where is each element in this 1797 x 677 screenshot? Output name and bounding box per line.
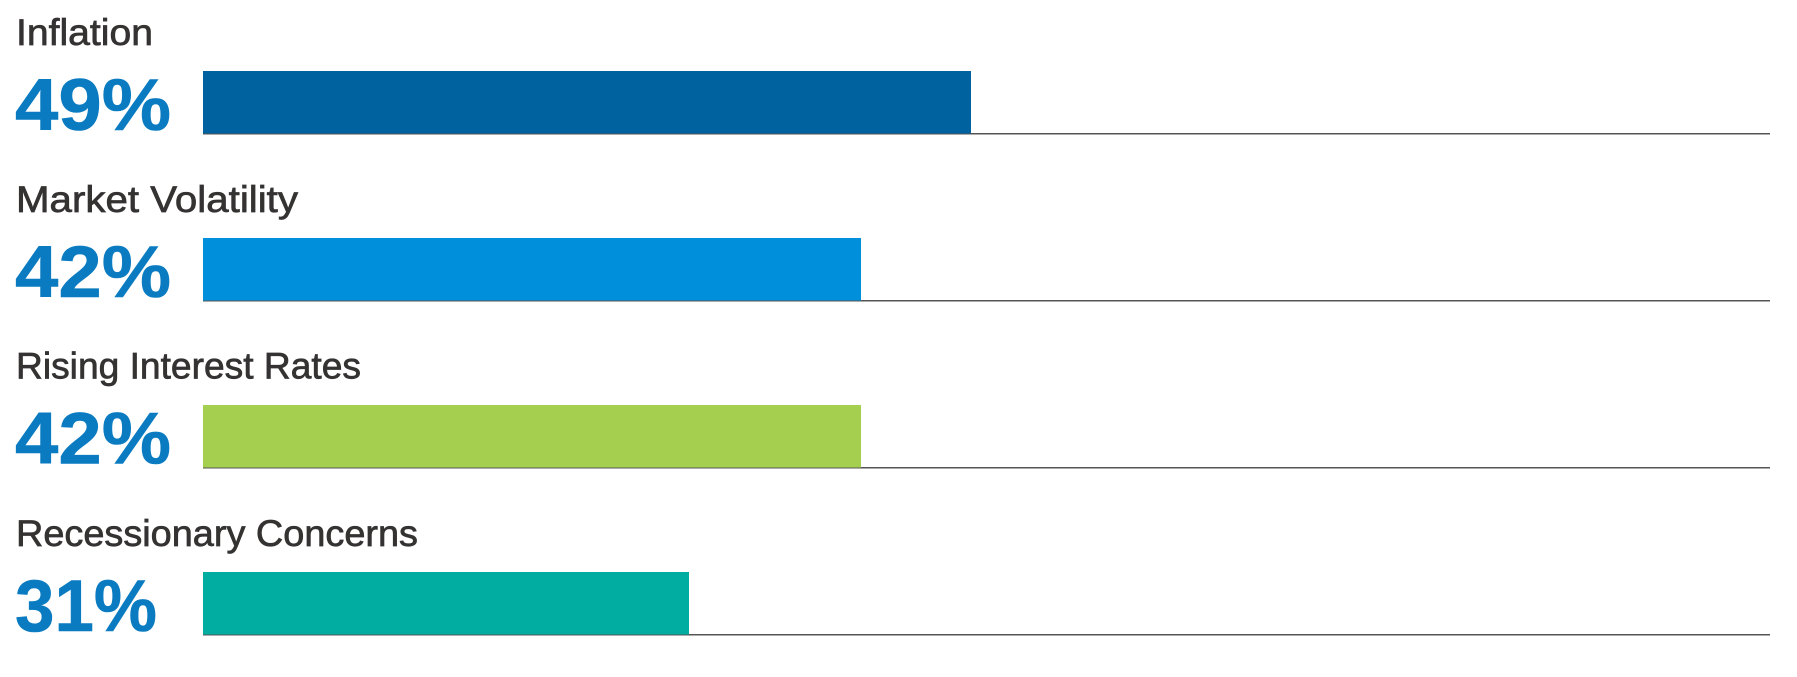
row: Recessionary Concerns — [15, 513, 1770, 647]
bar: 42% — [203, 405, 861, 468]
bar: 42% — [203, 238, 861, 300]
row: Inflation — [15, 12, 1770, 146]
bar: 31% — [203, 572, 689, 634]
label: Recessionary Concerns: Recessionary Concerns — [16, 513, 418, 554]
value: 49%: 49% — [15, 65, 171, 146]
value: 42%: 42% — [15, 232, 171, 313]
label: Inflation: Inflation — [16, 12, 153, 53]
label: Market Volatility: Market Volatility — [16, 179, 299, 220]
bar: 49% — [203, 71, 971, 134]
value: 42%: 42% — [15, 398, 171, 480]
value: 31%: 31% — [15, 566, 157, 647]
label: Rising Interest Rates: Rising Interest Rates — [16, 346, 361, 386]
row: Rising Interest Rates — [15, 346, 1770, 480]
row: Market Volatility — [15, 179, 1770, 313]
